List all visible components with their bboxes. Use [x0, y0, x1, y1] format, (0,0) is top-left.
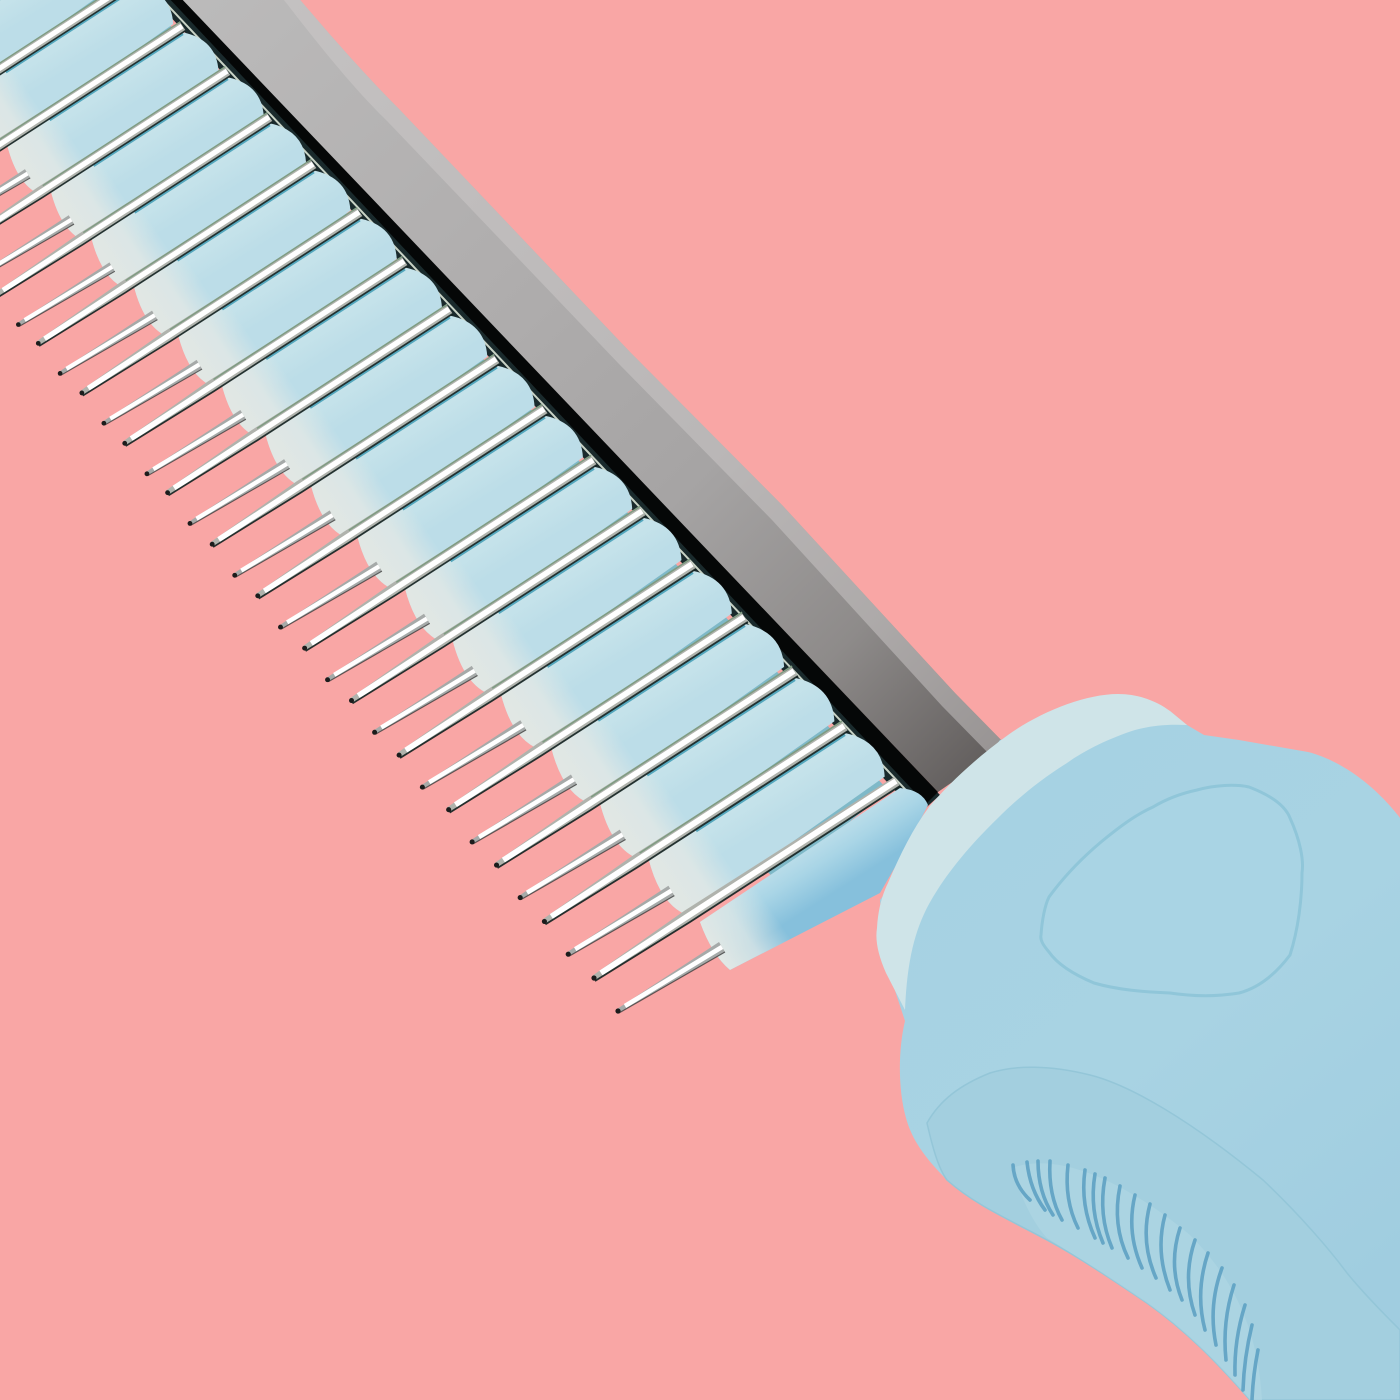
black shadow band under blade — [166, 0, 938, 804]
comb teeth: blue rollers with steel pins — [0, 0, 885, 957]
thin light line under shadow band — [158, 0, 920, 805]
raised grip pad on handle — [927, 1067, 1400, 1400]
thumb rest on handle — [1041, 785, 1302, 996]
pale collar ring of the handle — [876, 694, 1187, 1010]
blade light bevel along top edge — [280, 0, 1006, 757]
steel blade spine — [176, 0, 1006, 792]
last roller next to the handle — [591, 777, 928, 1014]
dark backing behind roller ends — [150, 0, 940, 815]
handle body — [880, 711, 1400, 1400]
light band behind grip ridges — [1012, 1163, 1262, 1400]
teal backing between rollers — [0, 0, 888, 882]
grip ridges — [1013, 1161, 1258, 1400]
